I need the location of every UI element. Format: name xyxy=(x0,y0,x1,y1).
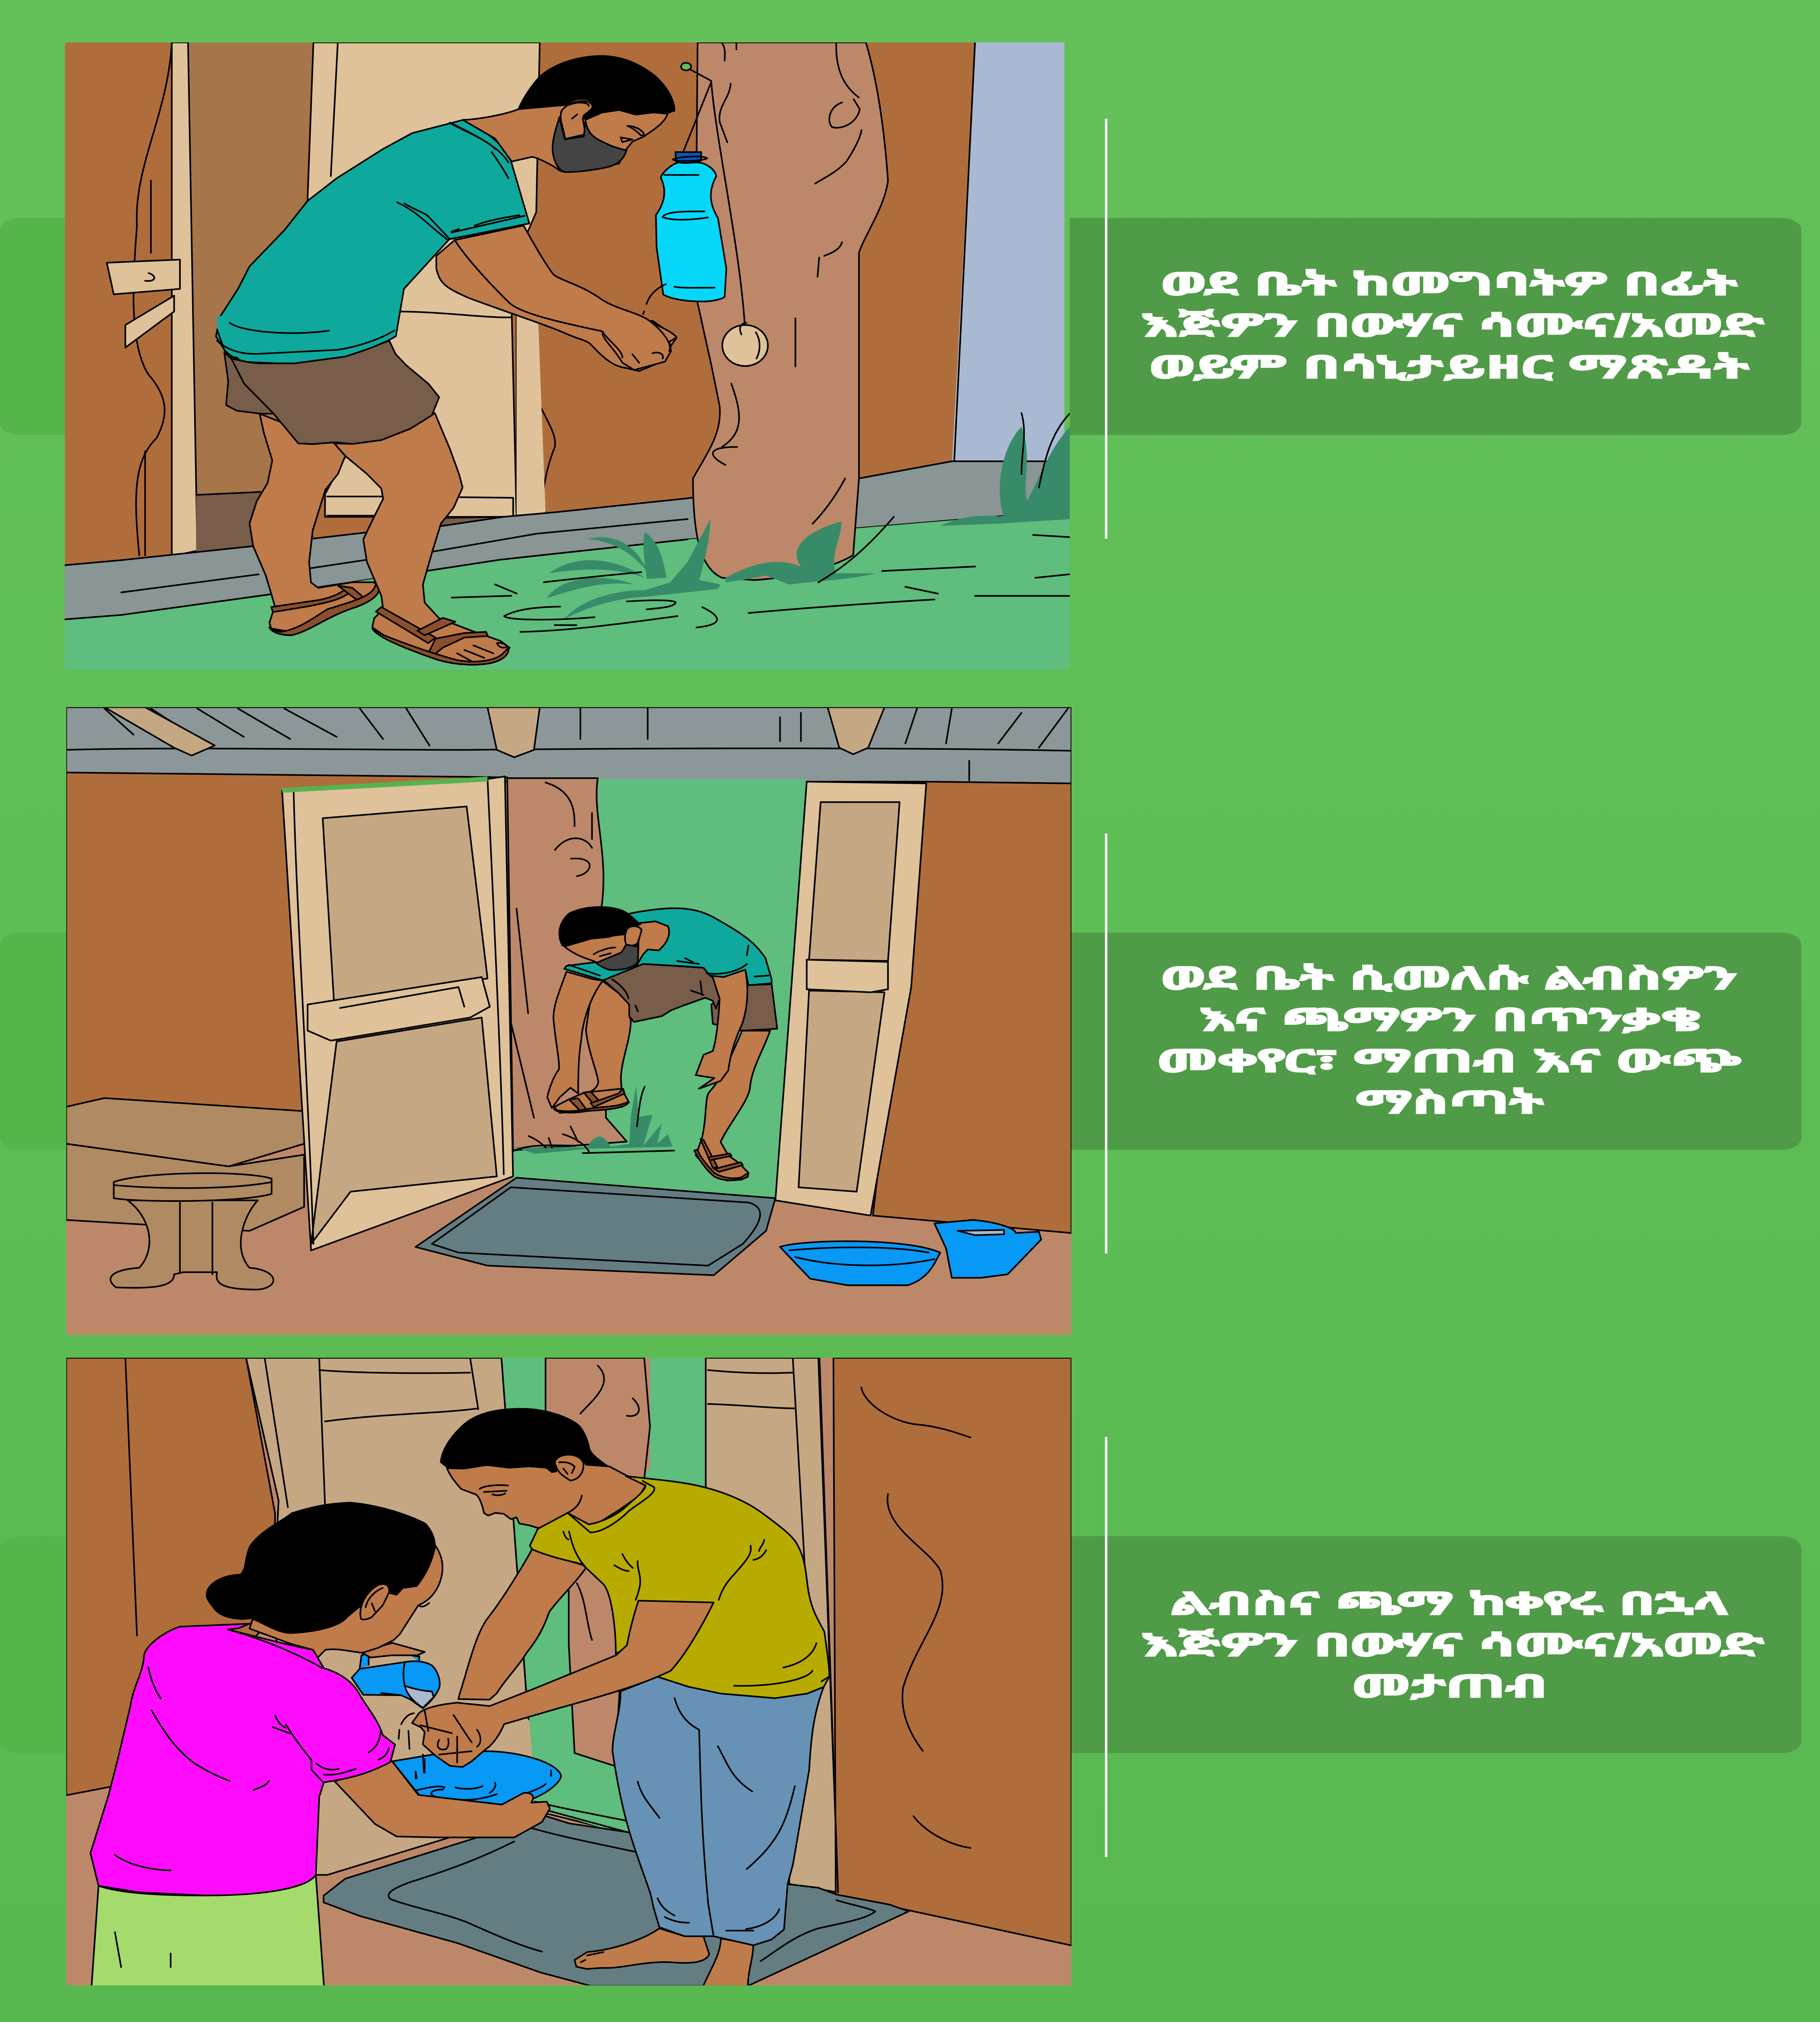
caption band 1 xyxy=(0,218,1801,435)
right door xyxy=(775,782,926,1216)
divider line 3 xyxy=(1105,1437,1107,1857)
basin xyxy=(392,1751,561,1808)
caption 1: እጅዎን በውሃና ሳሙና/አመድ xyxy=(1141,308,1764,343)
caption 2: መቀየር፣ ማጠብ እና ውጭ xyxy=(1157,1044,1741,1079)
roof rafters xyxy=(104,707,885,757)
bench xyxy=(66,1098,304,1231)
caption band 2 xyxy=(0,933,1801,1150)
man washing hands xyxy=(216,55,677,665)
caption 3: መታጠብ xyxy=(1352,1669,1547,1704)
panel: man washing hands at tippy tap before entering house xyxy=(63,42,1075,677)
woman skirt xyxy=(91,1875,325,2002)
grass tuft xyxy=(513,1086,674,1154)
man in yellow near arm and hands xyxy=(399,1601,713,1778)
man in yellow shirt lower body xyxy=(575,1677,824,1987)
string and soap xyxy=(679,63,768,366)
stool xyxy=(110,1173,273,1290)
man in yellow far arm, head and shirt xyxy=(440,1408,830,1700)
caption 1: ወይም በሳኒታይዘር ማጽዳት xyxy=(1149,350,1749,385)
panel: man changing shoes at doorway xyxy=(66,707,1071,1335)
water bottle xyxy=(643,152,726,314)
right plant xyxy=(940,427,1070,526)
small plant xyxy=(726,521,876,585)
tree trunk xyxy=(507,778,627,1150)
divider line 1 xyxy=(1105,119,1107,539)
door hinge strap xyxy=(107,260,180,348)
divider line 2 xyxy=(1105,833,1107,1253)
caption 1: ወደ ቤት ከመግባትዎ በፊት xyxy=(1161,267,1737,302)
caption 3 xyxy=(1141,1586,1764,1704)
jug xyxy=(934,1220,1041,1278)
mat xyxy=(324,1802,908,1986)
caption 2 xyxy=(1157,961,1741,1120)
caption 3: ልብስና ጫማ ከቀየሩ በኋላ xyxy=(1170,1586,1729,1622)
panel: woman pouring water for man washing hands xyxy=(66,1358,1071,2002)
caption band 3 xyxy=(0,1536,1801,1753)
tree trunk xyxy=(693,42,888,580)
trunk bark lines xyxy=(720,42,861,366)
mat xyxy=(415,1178,775,1275)
basin xyxy=(780,1241,940,1285)
tree trunk xyxy=(546,1358,650,1766)
caption 2: እና ጫማዎን በጥንቃቄ xyxy=(1199,1003,1701,1038)
water jug xyxy=(352,1653,440,1708)
left door xyxy=(282,776,513,1250)
woman xyxy=(91,1502,550,1895)
caption 3: እጅዎን በውሃና ሳሙና/አመድ xyxy=(1141,1628,1764,1663)
man picking up sandal xyxy=(547,906,777,1180)
caption 2: ማስጣት xyxy=(1356,1085,1544,1120)
large plant xyxy=(547,519,721,620)
caption 2: ወደ ቤት ሲመለሱ ልብስዎን xyxy=(1161,961,1737,996)
caption 1 xyxy=(1141,267,1764,385)
